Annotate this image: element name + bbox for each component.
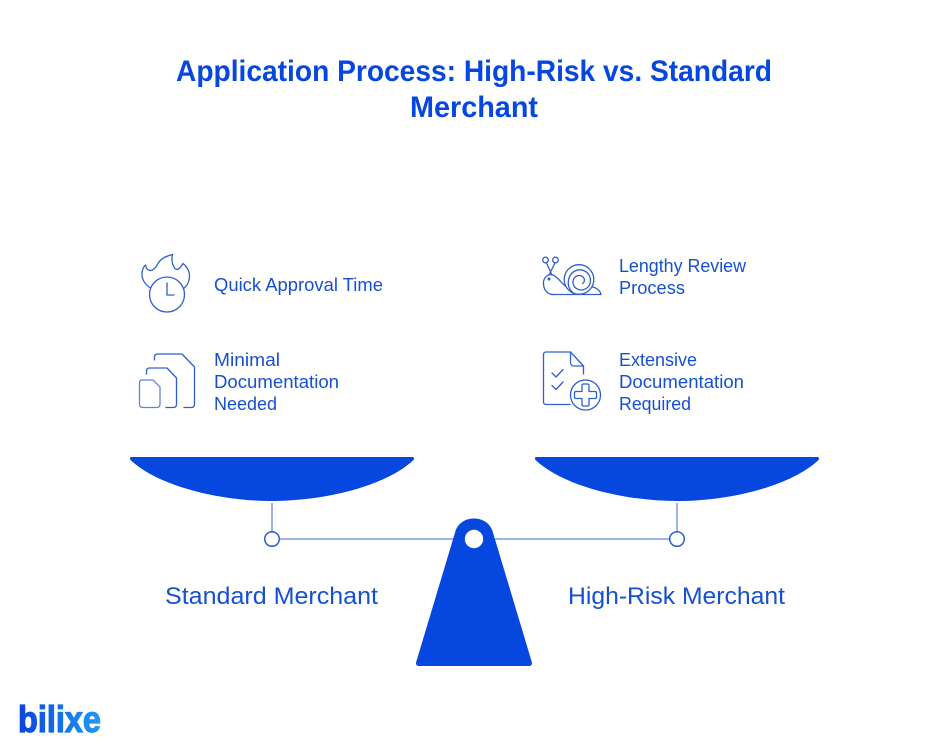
text: minimal documentation needed <box>214 350 339 414</box>
logo: bilixe <box>18 699 101 740</box>
scale beam and connectors <box>265 503 684 546</box>
fulcrum <box>416 518 532 666</box>
scale pan: right <box>535 457 819 501</box>
text: lengthy review process: Lengthy Review <box>619 256 747 276</box>
text: lengthy review process <box>619 256 747 298</box>
icon: snail <box>543 257 601 294</box>
text: minimal documentation needed: Minimal <box>214 350 280 370</box>
title <box>176 55 772 124</box>
icon: documents <box>140 354 194 408</box>
text: lengthy review process: Process <box>619 278 685 298</box>
text: quick approval time: Quick Approval Time <box>214 275 383 295</box>
text: minimal documentation needed: Needed <box>214 394 277 414</box>
label: high-risk merchant: High-Risk Merchant <box>568 583 785 610</box>
panel: standard merchant features <box>140 254 383 414</box>
text: extensive documentation required: Documentation <box>619 372 744 392</box>
title: Merchant <box>410 91 538 124</box>
scale: balance <box>130 457 819 666</box>
text: extensive documentation required: Extensive <box>619 350 697 370</box>
panel: high-risk merchant features <box>543 256 747 414</box>
icon: flame clock <box>142 254 190 312</box>
icon: checklist document with plus <box>544 352 600 410</box>
text: extensive documentation required: Required <box>619 394 691 414</box>
text: extensive documentation required <box>619 350 744 414</box>
title: Application Process: High-Risk vs. Standard <box>176 55 772 88</box>
label: standard merchant: Standard Merchant <box>165 583 378 610</box>
scale pan: left <box>130 457 414 501</box>
text: minimal documentation needed: Documentation <box>214 372 339 392</box>
